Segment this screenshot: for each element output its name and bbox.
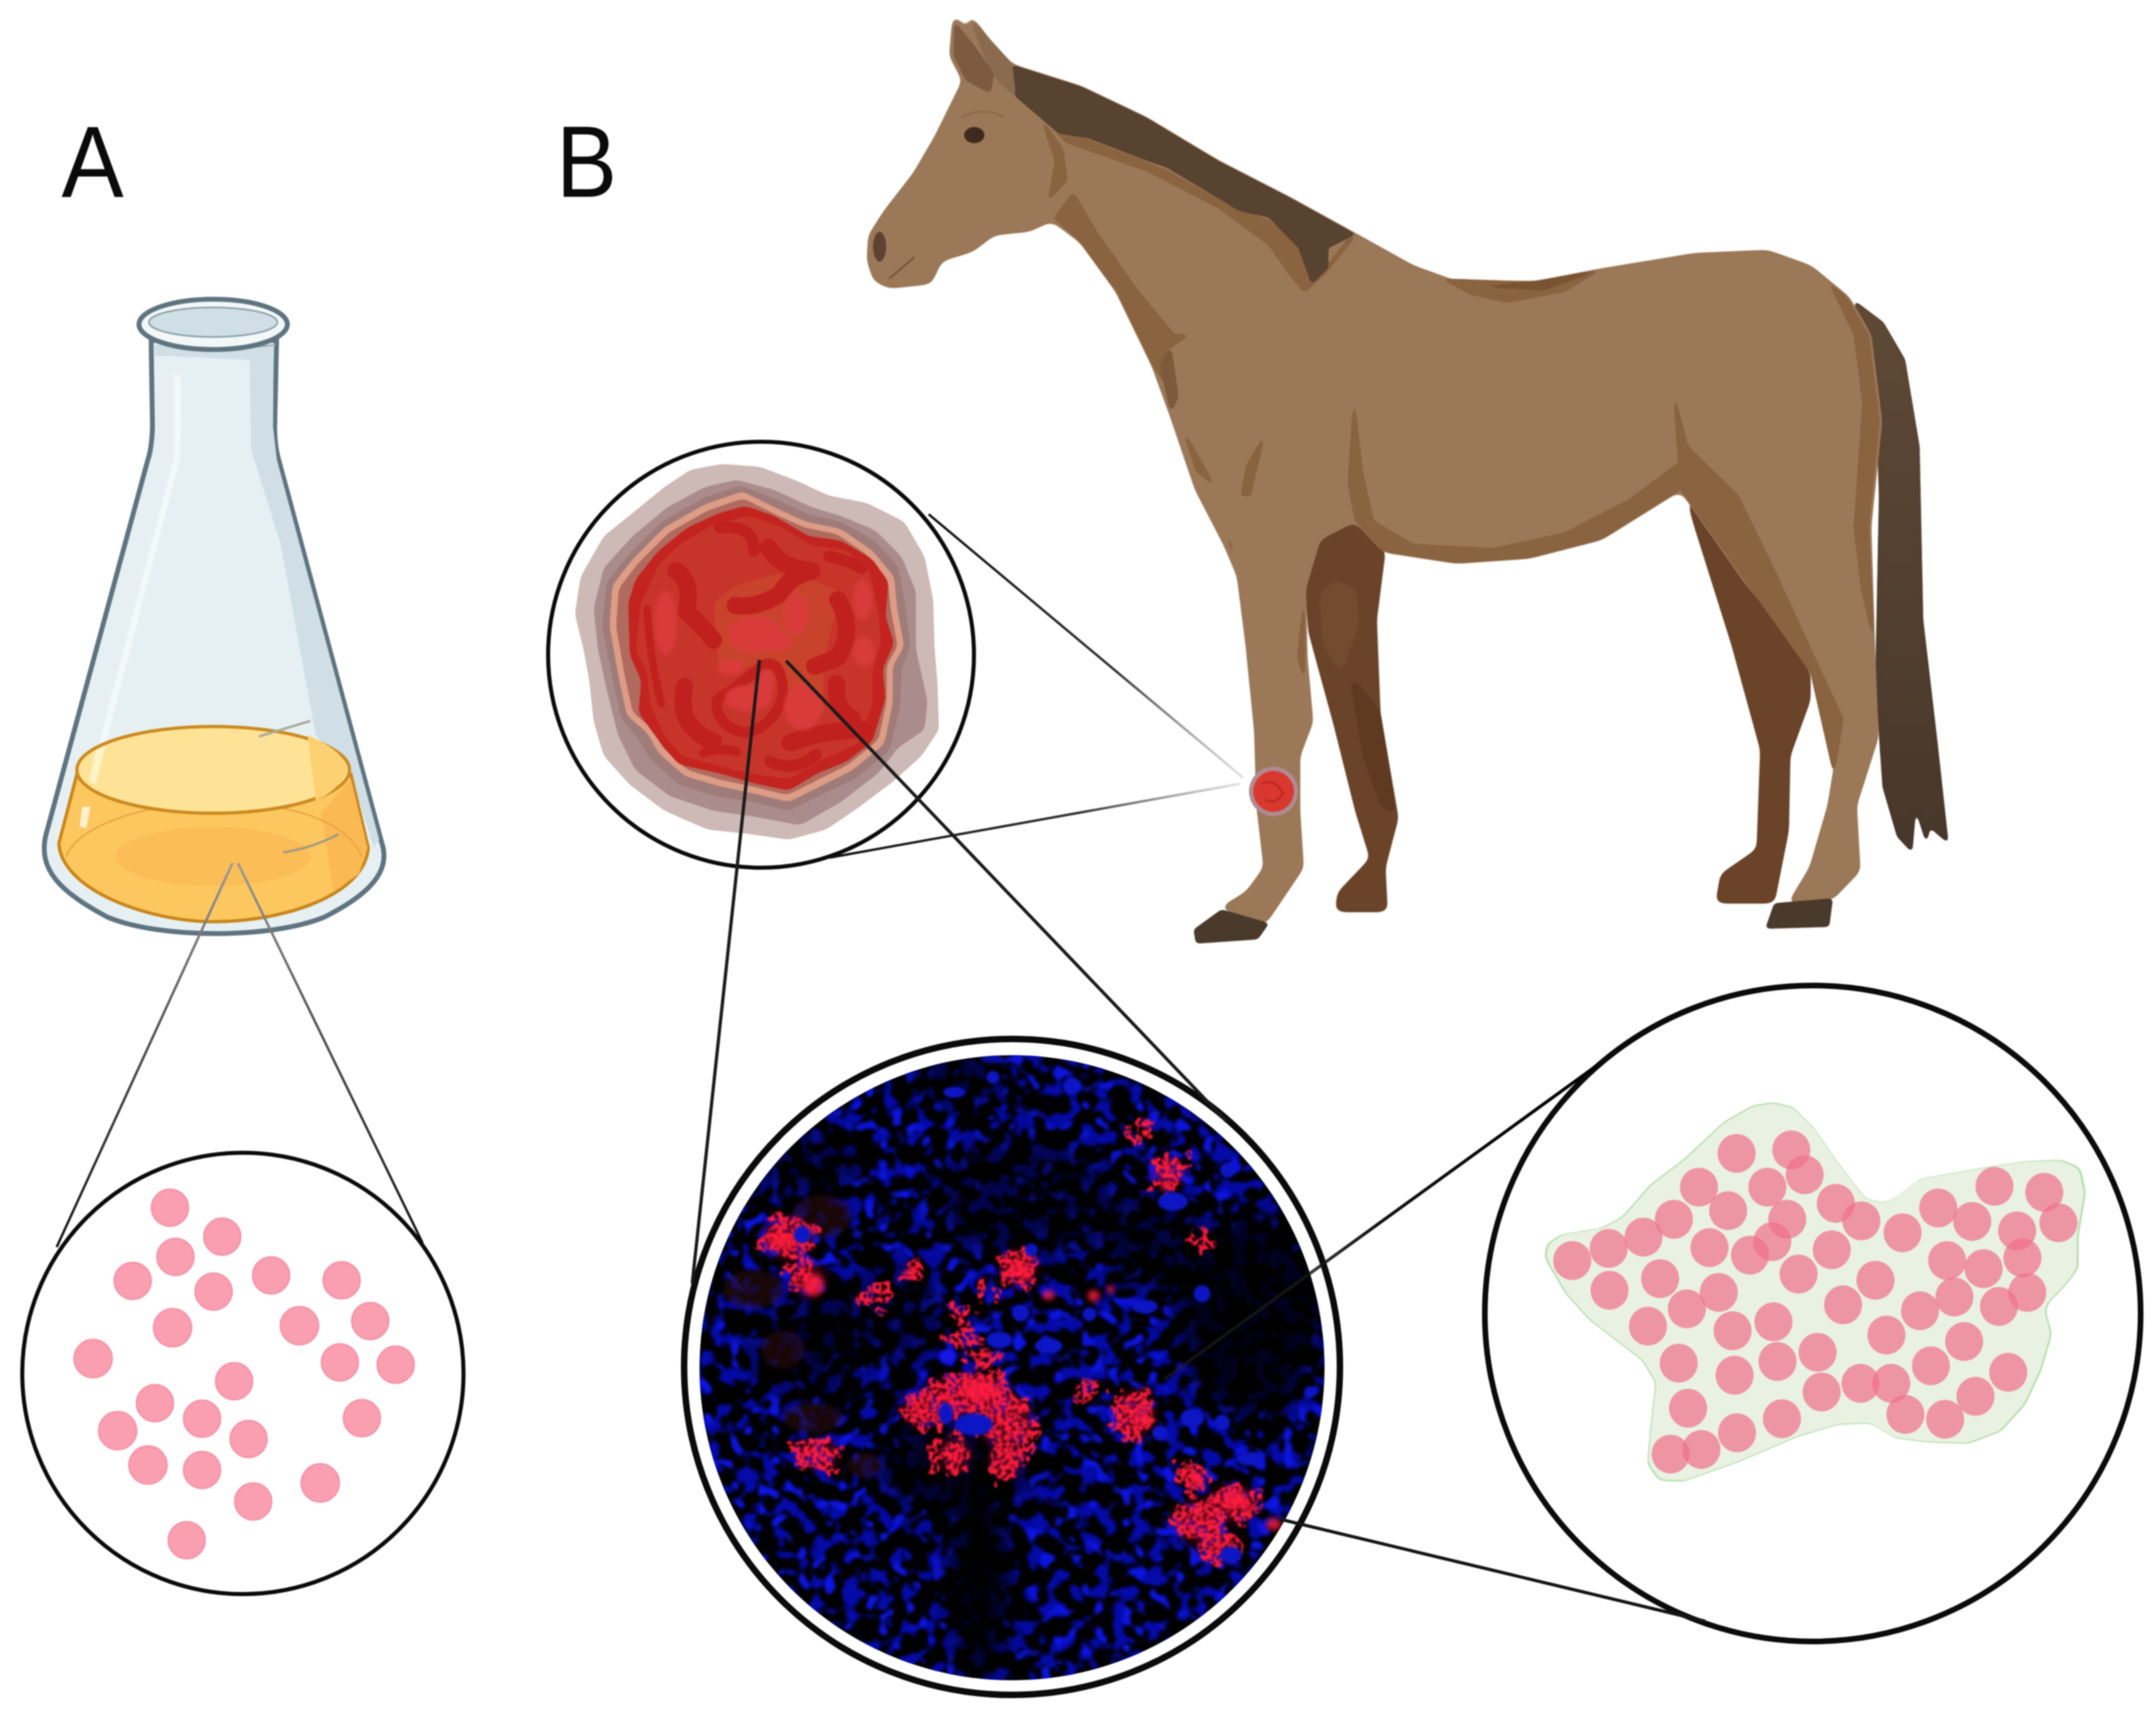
belly shading	[1348, 397, 1684, 563]
bright red cores	[770, 1181, 1282, 1531]
far hind leg	[1681, 483, 1810, 904]
circle: fluorescence microscopy image	[684, 1039, 1340, 1695]
label: B: B	[556, 106, 617, 219]
wound halo	[575, 464, 939, 840]
flask glass	[45, 340, 384, 934]
mane	[1012, 65, 1355, 284]
chest and neck shading	[1054, 192, 1189, 402]
mane underside shading	[1052, 127, 1357, 292]
liquid surface	[77, 726, 350, 813]
liquid depth ellipse	[116, 827, 310, 886]
wound pink ring	[610, 492, 904, 803]
graduation marks	[259, 721, 310, 736]
tissue folds	[647, 527, 864, 766]
zoom lines: wound to microscopy image	[692, 660, 1227, 1284]
illustration: horse	[868, 14, 1948, 943]
aggregate matrix	[1544, 1102, 2086, 1482]
blue cells over clusters	[793, 1071, 1316, 1564]
brown autofluorescence	[723, 1195, 882, 1478]
wound on leg	[1249, 767, 1298, 816]
circle A: planktonic bacteria	[23, 1153, 463, 1594]
blue nuclei texture	[696, 1053, 1328, 1684]
circle: wound close-up	[548, 442, 974, 868]
neck shading	[155, 345, 379, 848]
bright tissue	[655, 580, 874, 730]
aggregate bacteria	[1553, 1130, 2077, 1474]
zoom lines: flask to circle A	[57, 863, 423, 1247]
zoom lines: microscopy image to schematic	[1164, 1066, 1705, 1621]
tail	[1854, 300, 1948, 852]
hooves	[1194, 909, 1269, 943]
body	[868, 14, 1881, 923]
zoom lines: wound to horse leg	[830, 514, 1243, 858]
far front leg	[1304, 514, 1399, 913]
red bacterial clusters	[761, 1116, 1259, 1563]
circle: biofilm aggregate schematic	[1485, 986, 2141, 1641]
wound bed	[628, 506, 894, 790]
ears	[954, 23, 994, 93]
hind leg shading	[1673, 390, 1843, 775]
eye	[964, 127, 984, 143]
saddle shading	[1442, 270, 1601, 302]
liquid body	[59, 774, 368, 922]
flask rim	[139, 299, 287, 350]
red cluster glow	[763, 1160, 1257, 1560]
label: A: A	[62, 106, 124, 219]
nostril and mouth	[873, 232, 886, 262]
glass highlight	[93, 375, 181, 783]
dark tissue regions	[749, 1054, 1323, 1680]
flask	[45, 299, 384, 934]
